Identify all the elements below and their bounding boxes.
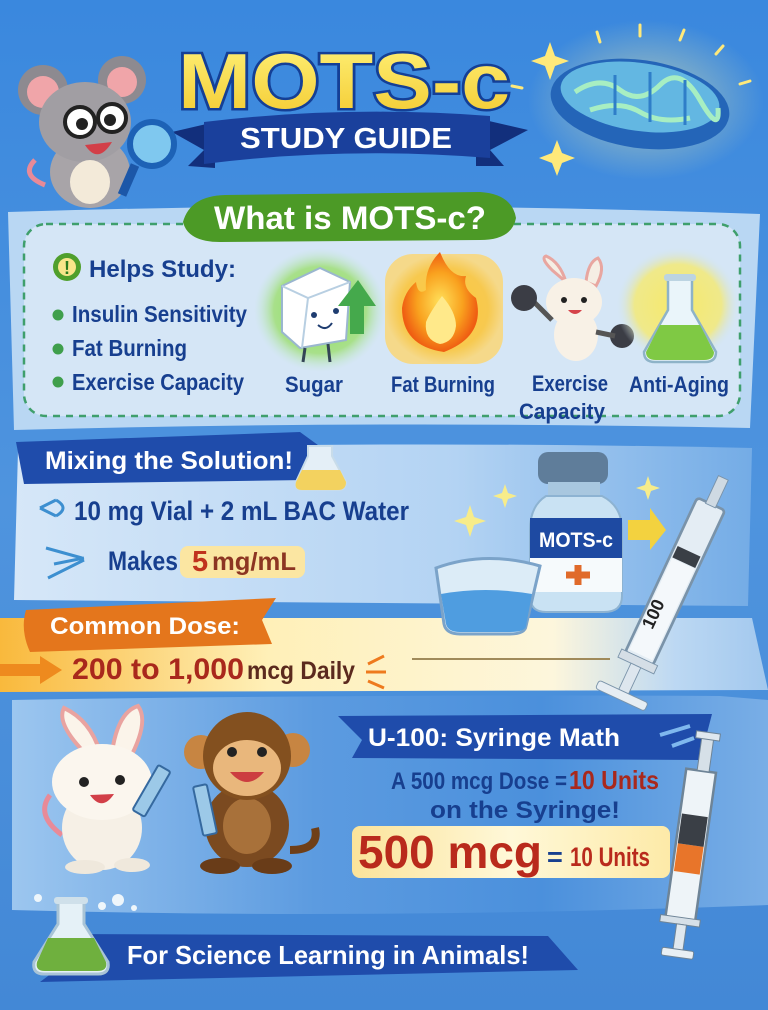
icon: rabbit with dumbbells <box>511 256 634 361</box>
subtitle text: STUDY GUIDE <box>240 123 452 155</box>
equation highlight: 500 mcg <box>358 826 542 878</box>
title: MOTS-c <box>178 37 510 125</box>
icon: large syringe: 100 <box>638 596 669 632</box>
label: anti-aging: Anti-Aging <box>629 372 729 397</box>
icon: flask <box>616 247 740 363</box>
icon: flame <box>385 252 503 364</box>
explanation line 2: on the Syringe! <box>430 797 620 824</box>
icon: mouse with magnifying glass <box>18 56 174 208</box>
helps study list: Exercise Capacity <box>72 369 244 395</box>
heading pill <box>183 192 516 242</box>
icon: arrow <box>40 500 63 516</box>
subtitle ribbon <box>172 112 528 168</box>
dose text: 200 to 1,000 <box>72 653 244 686</box>
icon: beaker <box>436 558 540 634</box>
vial label: MOTS-c <box>539 529 613 552</box>
explanation line 1: 10 Units <box>569 765 659 795</box>
text: vial and water: 10 mg Vial + 2 mL BAC Water <box>74 496 409 526</box>
sparkles <box>454 476 660 537</box>
icon: exclamation: ! <box>64 258 70 278</box>
label: exercise capacity: Exercise <box>532 371 608 396</box>
icon: green flask <box>34 894 137 974</box>
helps study list: Helps Study: <box>89 256 236 283</box>
text: makes: Makes <box>108 546 178 576</box>
heading <box>338 714 712 760</box>
footer ribbon: For Science Learning in Animals! <box>127 940 529 970</box>
icon: small syringe <box>655 729 726 960</box>
dashed frame <box>24 224 740 416</box>
explanation line 1 <box>391 765 659 795</box>
panel: syringe math area <box>12 696 768 914</box>
label: fat burning: Fat Burning <box>391 372 495 397</box>
icon: orange arrow <box>0 656 62 684</box>
heading <box>24 598 276 652</box>
icon: mitochondrion <box>512 20 764 180</box>
icon: exclamation <box>53 253 81 281</box>
equation highlight: 10 Units <box>570 842 650 872</box>
heading pill: What is MOTS-c? <box>214 200 486 236</box>
footer ribbon <box>40 934 578 982</box>
icon: burst arrow <box>46 548 84 578</box>
icon: monkey with syringe <box>184 712 316 874</box>
panel: mixing <box>14 432 752 606</box>
label: sugar: Sugar <box>285 372 343 397</box>
helps study list: Insulin Sensitivity <box>72 301 247 327</box>
panel: what is MOTS-c <box>8 192 760 430</box>
equation highlight <box>352 826 670 878</box>
heading <box>16 432 346 490</box>
explanation line 1: A 500 mcg Dose = <box>391 768 567 795</box>
label: capacity: Capacity <box>519 399 606 424</box>
dose unit text: mcg Daily <box>247 657 355 685</box>
icon: sugar cube <box>254 248 386 372</box>
text: makes: mg/mL <box>212 548 296 576</box>
heading: U-100: Syringe Math <box>368 724 620 752</box>
icon: yellow arrow <box>628 508 666 550</box>
icon: rabbit with syringe <box>45 706 171 874</box>
panel: common dose <box>0 598 768 692</box>
heading: Common Dose: <box>50 613 240 640</box>
helps study list <box>52 256 247 395</box>
icon: large syringe <box>595 466 748 711</box>
heading: Mixing the Solution! <box>45 447 293 475</box>
helps study list: Fat Burning <box>72 335 187 361</box>
icon: vial <box>530 452 622 612</box>
text: makes: 5 <box>192 546 208 578</box>
equation highlight: = <box>547 842 563 872</box>
text: makes <box>108 546 305 578</box>
